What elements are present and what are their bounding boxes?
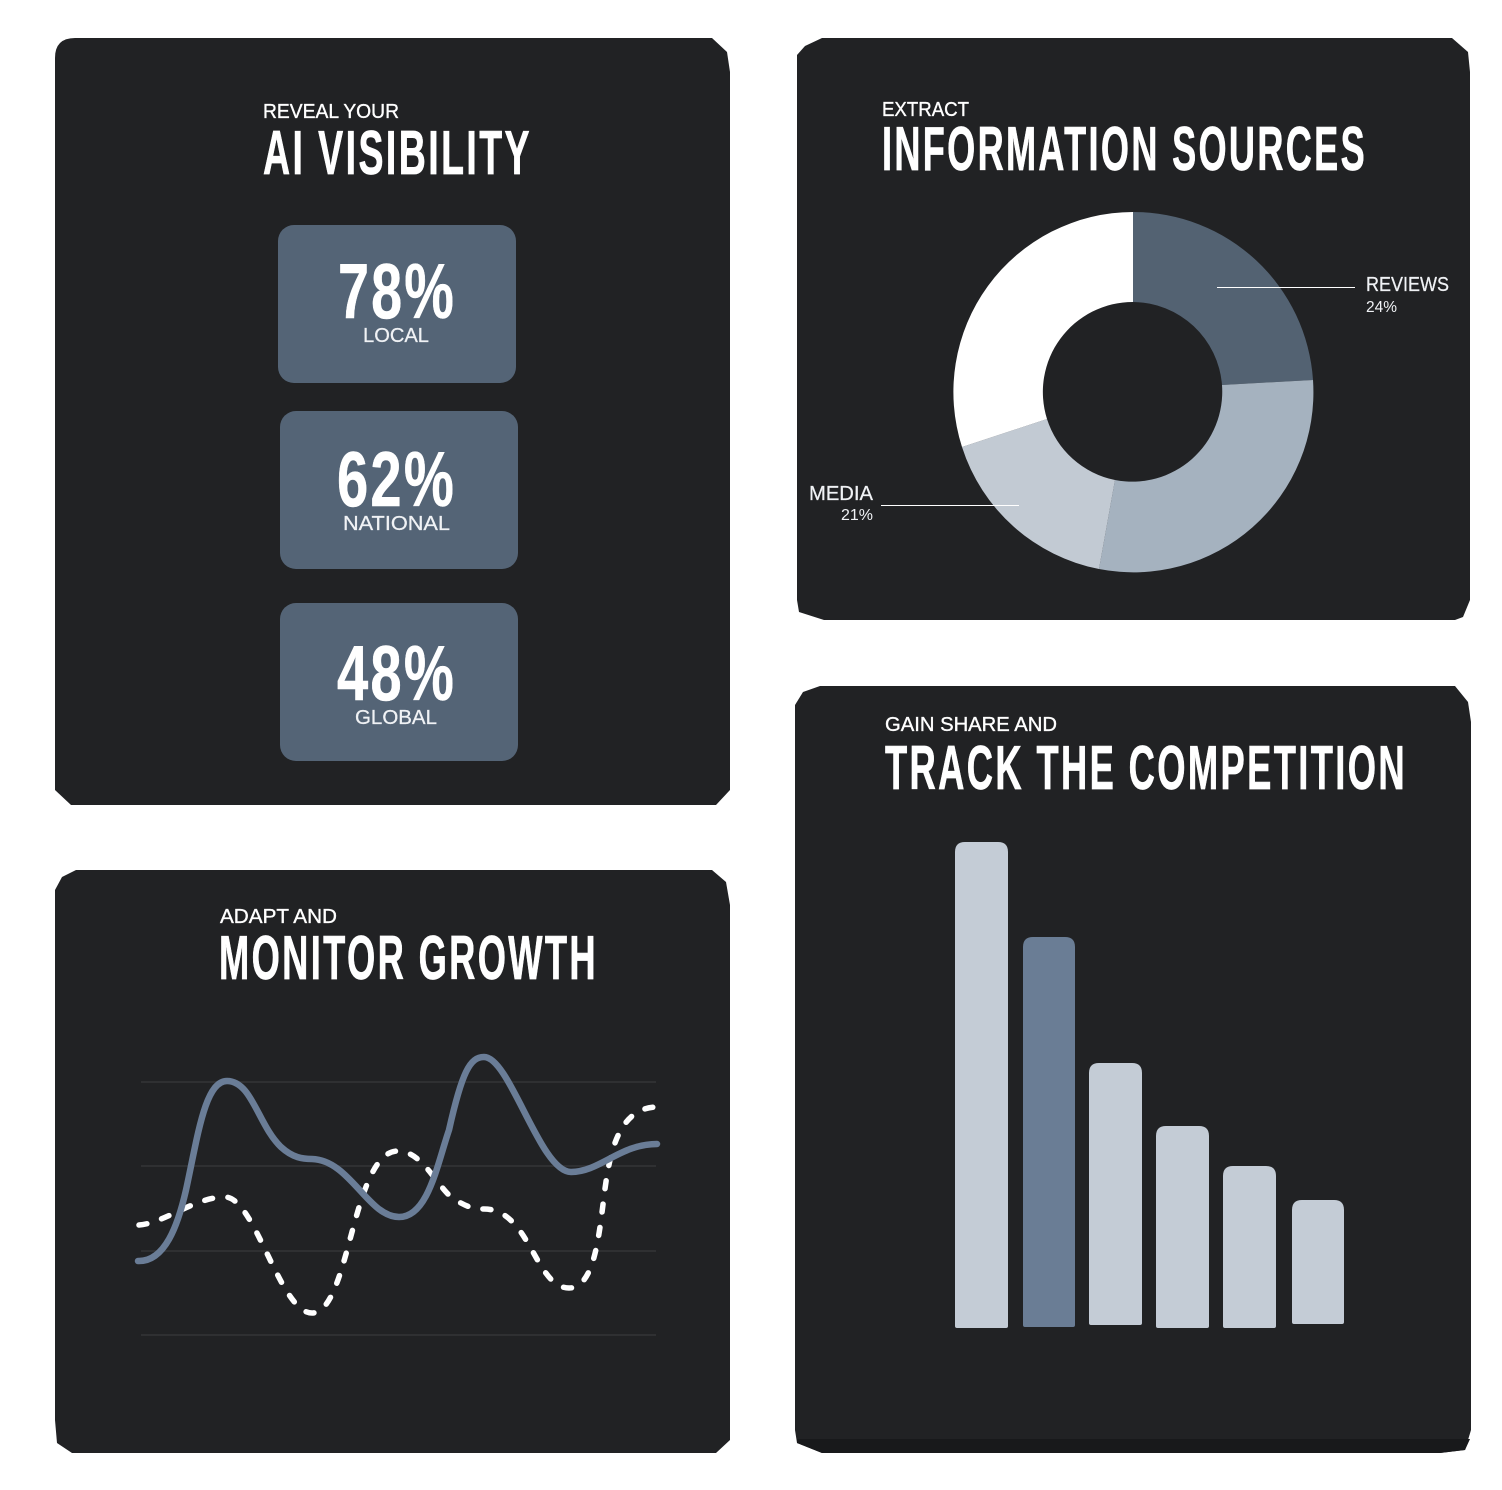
- bar chart: [955, 842, 1344, 1328]
- stat card: global: GLOBAL: [355, 707, 437, 729]
- eyebrow: extract: EXTRACT: [882, 99, 969, 121]
- panel: information sources: [797, 38, 1470, 620]
- callout: reviews: [1217, 274, 1449, 316]
- stat card: global: 48%: [337, 629, 456, 717]
- panel background: [55, 870, 730, 1453]
- donut chart: [953, 212, 1313, 572]
- callout: media: 21%: [841, 507, 873, 524]
- stat card: national: [280, 411, 518, 569]
- stat card: local: LOCAL: [363, 325, 429, 347]
- panel: track the competition: [795, 686, 1471, 1453]
- callout: media: MEDIA: [809, 483, 874, 505]
- eyebrow: gain share and: GAIN SHARE AND: [885, 714, 1057, 736]
- callout: reviews: 24%: [1366, 299, 1397, 316]
- heading: monitor growth: MONITOR GROWTH: [219, 924, 598, 993]
- heading: AI visibility: AI VISIBILITY: [263, 119, 532, 188]
- eyebrow: adapt and: ADAPT AND: [220, 906, 337, 928]
- callout: media: [809, 483, 1019, 524]
- panel bottom shadow strip: [797, 1439, 1470, 1453]
- panel background: [795, 686, 1471, 1453]
- line chart: [138, 1057, 657, 1335]
- panel: AI visibility: [55, 38, 730, 805]
- panel background: [55, 38, 730, 805]
- callout: reviews: REVIEWS: [1366, 274, 1449, 296]
- panel: monitor growth: [55, 870, 730, 1453]
- stat card: national: NATIONAL: [343, 513, 450, 535]
- stat card: local: 78%: [338, 247, 456, 335]
- panel background: [797, 38, 1470, 620]
- stat card: local: [278, 225, 516, 383]
- stat card: global: [280, 603, 518, 761]
- eyebrow: reveal your: REVEAL YOUR: [263, 101, 399, 123]
- stat card: national: 62%: [337, 435, 456, 523]
